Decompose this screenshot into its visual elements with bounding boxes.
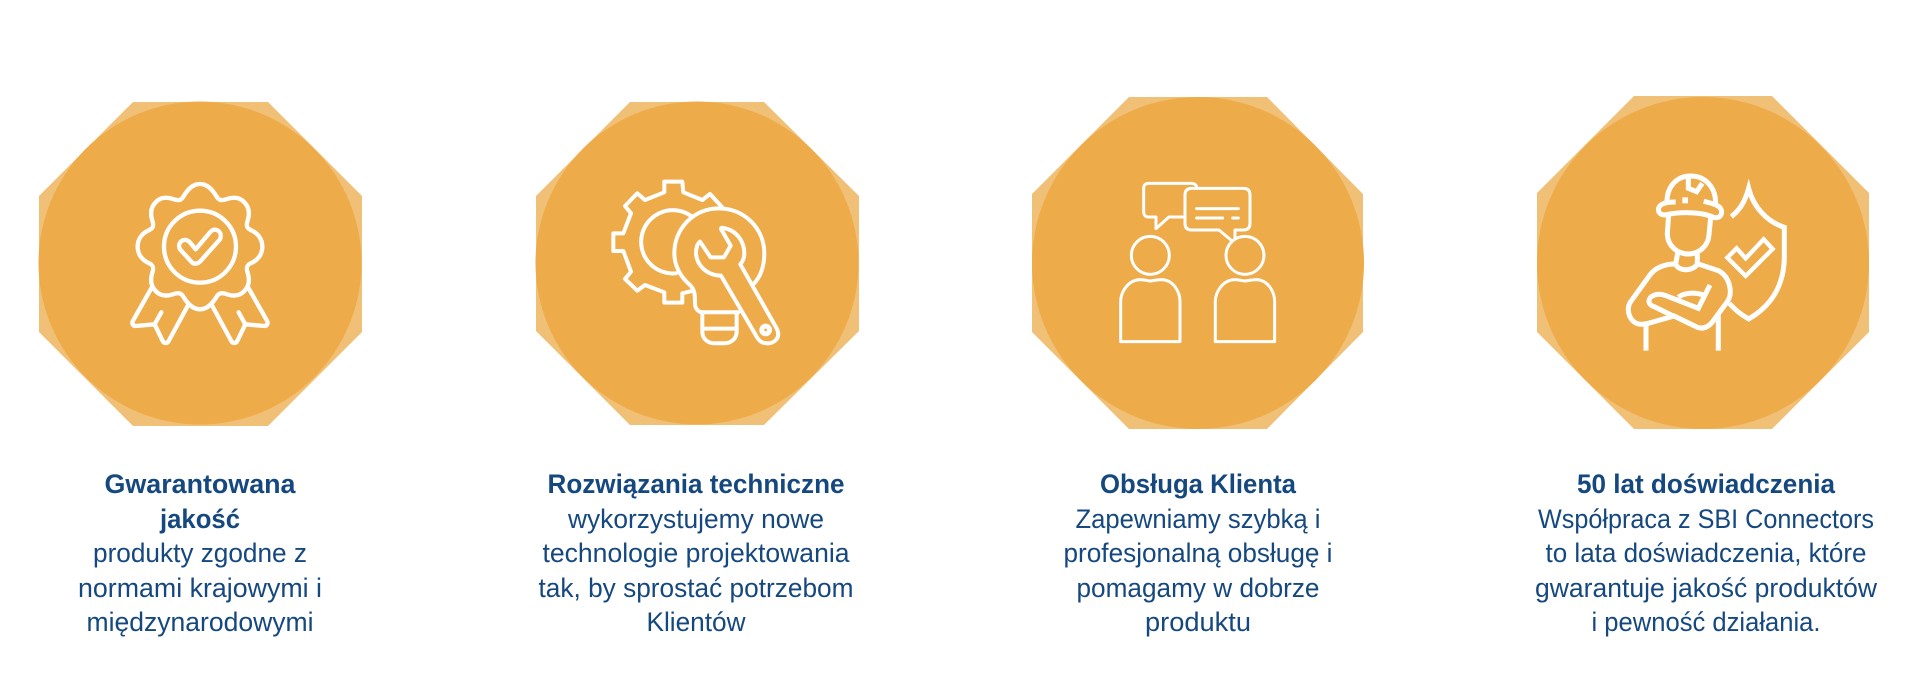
- description: wykorzystujemy nowe: [567, 504, 824, 534]
- heading: Gwarantowana: [104, 469, 296, 499]
- octagon background: [536, 102, 859, 425]
- octagon background: [1537, 96, 1869, 429]
- description: [1064, 504, 1332, 637]
- panel: customer service: [1032, 97, 1364, 637]
- description: Współpraca z SBI Connectors: [1538, 504, 1874, 534]
- circle background: [38, 102, 362, 424]
- icon: gear, light bulb and wrench: [613, 182, 778, 343]
- circle background: [1032, 97, 1364, 429]
- description: tak, by sprostać potrzebom: [538, 573, 854, 603]
- description: międzynarodowymi: [86, 607, 314, 637]
- description: [1535, 504, 1878, 637]
- description: normami krajowymi i: [78, 573, 322, 603]
- circle background: [536, 102, 858, 424]
- heading: 50 lat doświadczenia: [1577, 469, 1835, 499]
- description: Zapewniamy szybką i: [1076, 504, 1320, 534]
- circle background: [1537, 97, 1869, 429]
- octagon background: [39, 102, 362, 426]
- description: i pewność działania.: [1592, 607, 1820, 637]
- panel: technical solutions: [536, 102, 859, 637]
- heading: Rozwiązania techniczne: [548, 469, 844, 499]
- heading: [104, 469, 296, 534]
- description: [78, 538, 322, 637]
- description: produktu: [1145, 607, 1251, 637]
- panel: guaranteed quality: [38, 102, 362, 637]
- heading: jakość: [159, 504, 240, 534]
- description: Klientów: [646, 607, 746, 637]
- panel: 50 years of experience: [1535, 96, 1878, 637]
- description: profesjonalną obsługę i: [1064, 538, 1332, 568]
- description: to lata doświadczenia, które: [1546, 538, 1866, 568]
- heading: Obsługa Klienta: [1100, 469, 1296, 499]
- description: gwarantuje jakość produktów: [1535, 573, 1878, 603]
- icon: award rosette with check: [132, 184, 268, 343]
- description: pomagamy w dobrze: [1076, 573, 1320, 603]
- description: technologie projektowania: [542, 538, 850, 568]
- description: [538, 504, 854, 637]
- icon: engineer with shield: [1628, 176, 1784, 351]
- octagon background: [1032, 97, 1363, 429]
- icon: two people talking: [1121, 183, 1275, 342]
- description: produkty zgodne z: [93, 538, 307, 568]
